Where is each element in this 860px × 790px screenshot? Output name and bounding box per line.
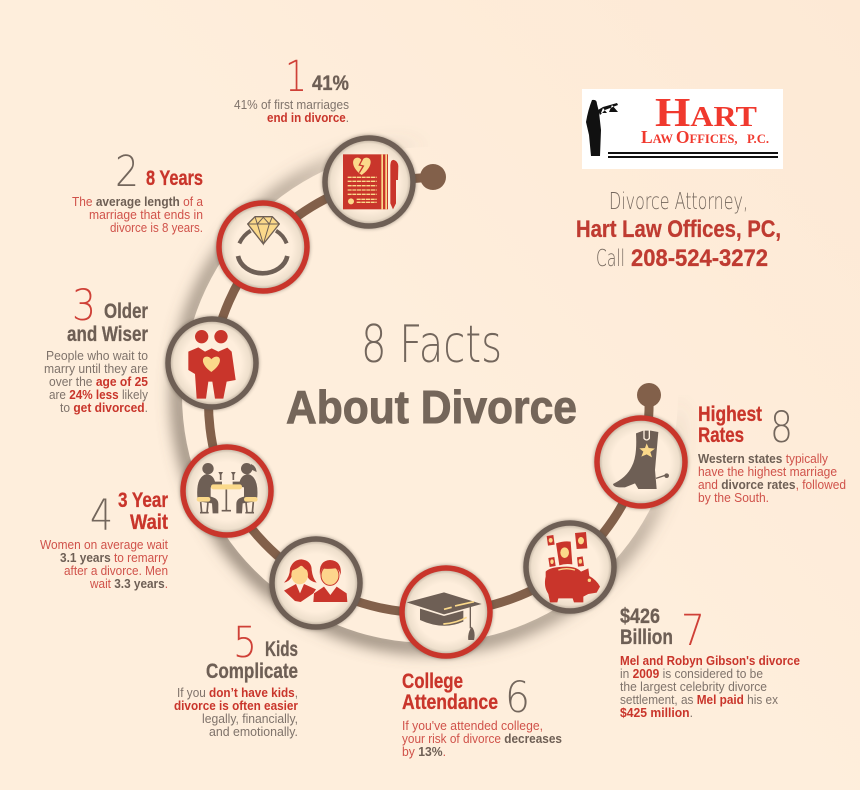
cta line 1: Divorce Attorney, <box>609 189 748 215</box>
fact 3: 3 <box>72 281 96 331</box>
circle badge 3 <box>165 316 259 410</box>
fact 2 <box>72 147 203 235</box>
fact 6: 6 <box>505 673 530 723</box>
icon: cowboy boot <box>613 430 669 489</box>
circle badge 1 <box>322 135 416 229</box>
fact 7: $425 million. <box>620 706 693 720</box>
title <box>286 315 577 433</box>
fact 8: Western states typically <box>698 452 829 466</box>
fact 4: Wait <box>130 511 168 534</box>
fact 4 <box>40 489 169 591</box>
fact 6: College <box>402 670 463 693</box>
fact 1 <box>234 52 349 125</box>
fact 6 <box>402 670 562 759</box>
fact 5: 5 <box>233 618 257 668</box>
fact 3: marry until they are <box>44 362 148 376</box>
circle badge 8 <box>594 415 688 509</box>
fact 5: divorce is often easier <box>174 699 298 713</box>
fact 2: The average length of a <box>72 195 203 209</box>
fact 4: 3.1 years to remarry <box>60 551 169 565</box>
icon: couple at a table <box>197 463 258 513</box>
cta line 3: 208-524-3272 <box>631 245 768 272</box>
icon: couple with heart <box>188 330 236 399</box>
call to action <box>576 189 781 272</box>
fact 4: 4 <box>90 491 113 541</box>
circle badge 6 <box>399 565 493 659</box>
fact 3: People who wait to <box>46 349 148 363</box>
circle badge 2 <box>216 200 310 294</box>
logo wordmark: HART <box>655 89 757 135</box>
fact 3: Older <box>104 300 148 323</box>
fact 5: Kids <box>265 638 298 661</box>
fact 2: 2 <box>115 147 139 197</box>
fact 7: Mel and Robyn Gibson's divorce <box>620 654 800 668</box>
logo: Hart Law Offices <box>582 89 783 169</box>
fact 8: by the South. <box>698 491 769 505</box>
icon: piggy bank with money <box>545 532 600 602</box>
connecting timeline path <box>208 164 661 613</box>
fact 2: marriage that ends in <box>89 208 203 222</box>
fact 7 <box>620 605 800 720</box>
fact 1: 41% <box>312 72 349 95</box>
fact 2: 8 Years <box>146 167 203 190</box>
fact 5 <box>174 618 298 739</box>
cta line 2: Hart Law Offices, PC, <box>576 216 781 243</box>
fact 5: and emotionally. <box>209 725 298 739</box>
circle badge 7 <box>523 520 617 614</box>
fact 6: by 13%. <box>402 745 446 759</box>
fact 2: divorce is 8 years. <box>110 221 203 235</box>
fact 7: $426 <box>620 605 660 628</box>
fact 5: Complicate <box>206 660 298 683</box>
fact 4: wait 3.3 years. <box>89 577 168 591</box>
icon: diamond ring <box>238 217 287 273</box>
icon: woman and man portraits <box>284 559 347 602</box>
icon: graduation cap <box>407 592 482 640</box>
fact 6: If you've attended college, <box>402 719 543 733</box>
cta line 3: Call <box>596 246 625 272</box>
fact 7: Billion <box>620 626 673 649</box>
fact 3: over the age of 25 <box>49 375 148 389</box>
title line: 8 Facts: 8 Facts <box>361 315 502 375</box>
fact 1: end in divorce. <box>267 111 349 125</box>
fact 7: the largest celebrity divorce <box>620 680 767 694</box>
fact 4: after a divorce. Men <box>64 564 168 578</box>
fact 8: 8 <box>770 403 793 453</box>
fact 8: Highest <box>698 403 762 426</box>
fact 4: Women on average wait <box>40 538 168 552</box>
fact 6: Attendance <box>402 691 498 714</box>
background disc with arc shadow <box>179 144 681 646</box>
fact 3: to get divorced. <box>60 401 148 415</box>
fact 1: 41% of first marriages <box>234 98 349 112</box>
fact 7: in 2009 is considered to be <box>620 667 763 681</box>
fact 8: and divorce rates, followed <box>698 478 846 492</box>
fact 3: and Wiser <box>67 323 148 346</box>
fact 5: If you don’t have kids, <box>177 686 298 700</box>
fact 8: Rates <box>698 424 744 447</box>
fact 5: legally, financially, <box>202 712 298 726</box>
circle badge 4 <box>180 444 274 538</box>
fact 6: your risk of divorce decreases <box>402 732 562 746</box>
fact 1: 1 <box>285 52 307 102</box>
fact 7: settlement, as Mel paid his ex <box>620 693 779 707</box>
fact 3: are 24% less likely <box>49 388 149 402</box>
icon: divorce document and pen <box>343 154 398 209</box>
fact 4: 3 Year <box>118 489 168 512</box>
fact 7: 7 <box>681 606 705 656</box>
title line: About Divorce: About Divorce <box>286 381 577 433</box>
logo statue of justice <box>586 100 618 156</box>
fact 3 <box>44 281 149 415</box>
circle badge 5 <box>269 536 363 630</box>
fact 8: have the highest marriage <box>698 465 837 479</box>
fact 8 <box>698 403 846 505</box>
logo subline: LAW OFFICES, P.C. <box>641 127 769 147</box>
